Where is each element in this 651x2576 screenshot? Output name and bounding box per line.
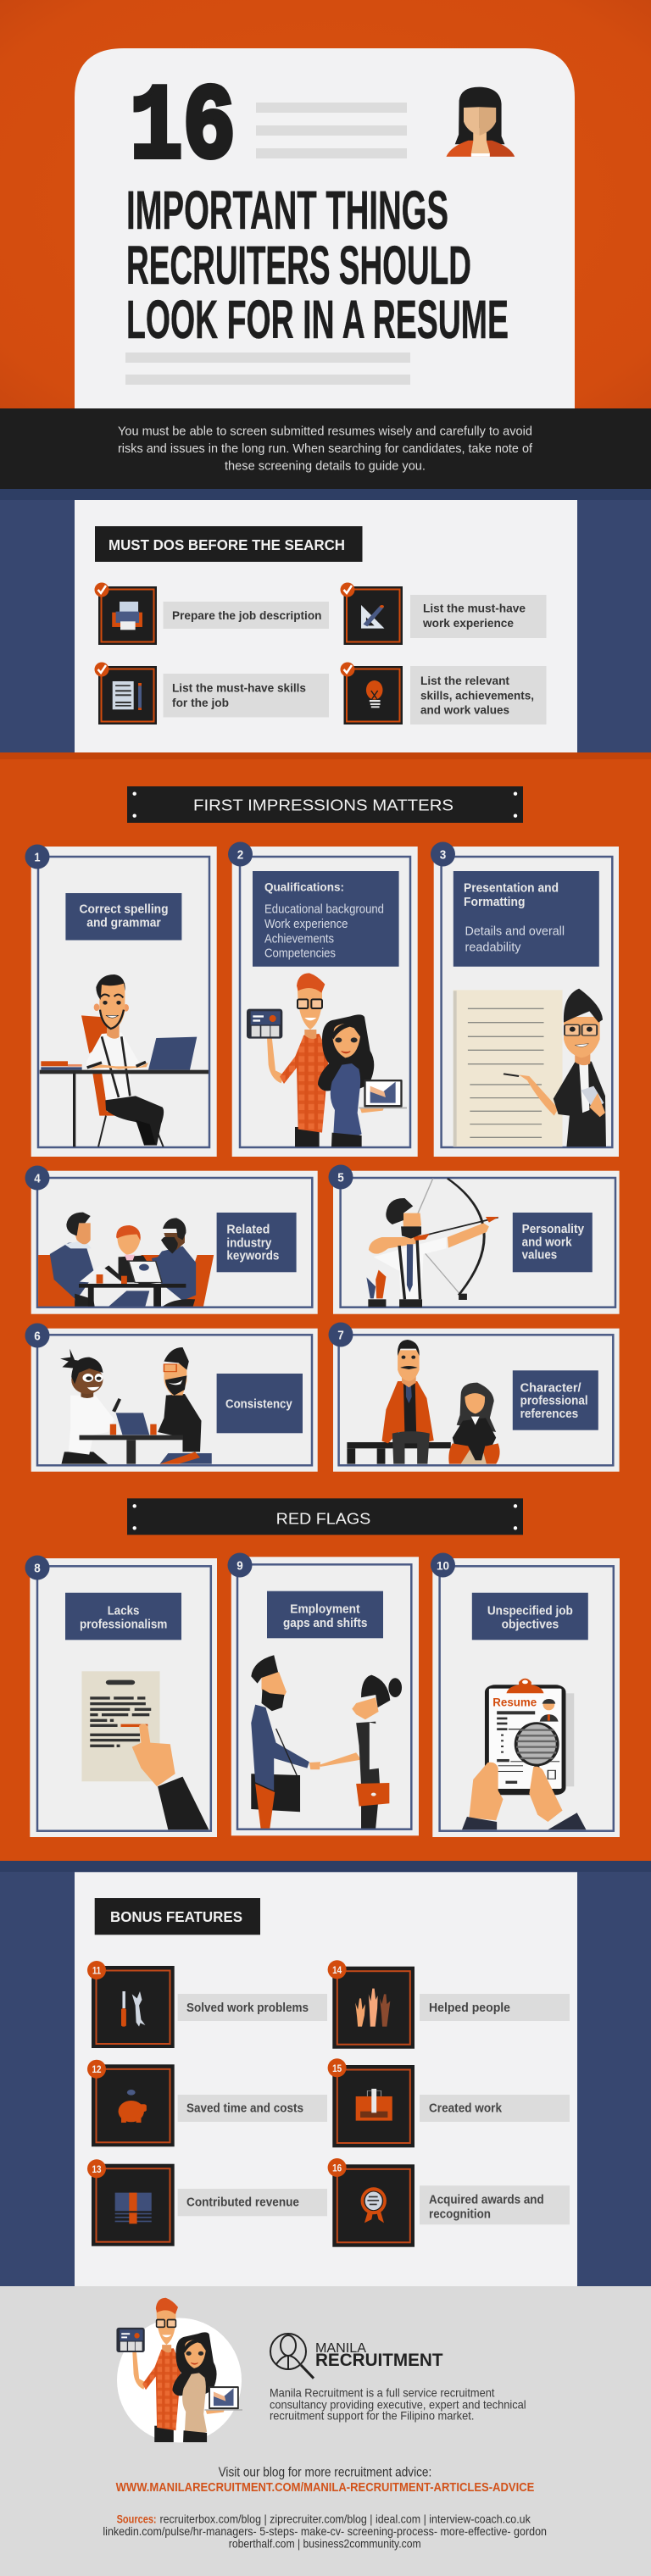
label box 4: Related [226,1224,270,1237]
sources [103,2512,547,2551]
number badge 7: 7 [337,1329,344,1342]
label box 5 [513,1213,593,1272]
label box 2 [253,871,399,967]
item 16: acquired awards: 16 [332,2162,342,2174]
number badge 2: 2 [237,847,243,863]
number badge 6 [25,1324,49,1347]
item 16: acquired awards: Acquired awards and [429,2193,544,2207]
number badge 8 [25,1556,49,1579]
item: list work experience [341,583,546,645]
label box 7 [513,1370,598,1430]
item 11: solved work problems: 11 [92,1964,101,1976]
item 13: contributed revenue: 13 [92,2163,102,2175]
orange main section background [0,752,651,1861]
sources: linkedin.com/pulse/hr-managers- 5-steps- make-cv- screening-process- more-effective- gordon [103,2524,547,2538]
heading plaque: first impressions: FIRST IMPRESSIONS MATTERS [193,797,453,814]
label box 2: Achievements [264,932,334,946]
item 14: helped people: Helped people [429,2001,510,2015]
illustration: man at desk [40,974,209,1146]
number badge 3: 3 [440,847,446,863]
logo: manila recruitment [270,2334,442,2379]
decorative lines below title [125,353,410,385]
illustration: archer [366,1179,499,1307]
company description: consultancy providing executive, expert and technical [270,2397,526,2411]
label box 7: professional [520,1395,588,1408]
item: prepare the job description: Prepare the job description [172,608,322,622]
footer section [0,2286,651,2576]
label box 5: and work [522,1235,572,1249]
panel 9: employment gaps and shifts [227,1552,419,1835]
label box 3: Details and overall [465,925,565,939]
panel 3: presentation and formatting [431,842,619,1157]
illustration: three people at table [38,1213,214,1307]
item 14: helped people: 14 [332,1964,342,1976]
label box 5: values [522,1249,557,1263]
heading: must dos: MUST DOS BEFORE THE SEARCH [108,536,345,553]
heading plaque: red flags: RED FLAGS [276,1510,370,1527]
number badge 10 [431,1552,455,1578]
company description: recruitment support for the Filipino market. [270,2409,474,2423]
label box 10 [472,1593,588,1640]
number badge 9: 9 [236,1559,243,1573]
item 14: helped people [328,1960,570,2049]
number badge 1: 1 [34,851,41,864]
item: list relevant skills: and work values [420,703,509,717]
label box 2: Work experience [264,918,348,931]
item 12: saved time and costs [87,2060,327,2146]
label box 6 [217,1374,303,1433]
panel 10: unspecified job objectives [431,1552,620,1837]
illustration: man and woman with devices [247,973,407,1146]
label box 10: Unspecified job [487,1605,573,1618]
label box 4: keywords [226,1250,279,1263]
panel 8: lacks professionalism [25,1556,217,1837]
item: list relevant skills [341,663,546,724]
item: list must-have skills: for the job [172,696,229,709]
label box 2: Qualifications: [264,880,344,894]
blog call to action [116,2466,534,2495]
number badge 6: 6 [34,1329,41,1344]
panel 5: personality and work values [329,1164,620,1314]
item 11: solved work problems: Solved work problems [186,2001,309,2015]
label box 1: Correct spelling [80,903,168,917]
label box 8: Lacks [108,1605,139,1618]
panel: bonus features [0,1861,651,2286]
sources: roberthalf.com | business2community.com [229,2537,421,2551]
item 15: created work: Created work [429,2102,503,2116]
item: list work experience: work experience [422,616,514,630]
title [126,180,509,350]
label box 1: and grammar [86,916,161,930]
item: list must-have skills [95,663,329,724]
label box 3: readability [465,941,521,955]
intro band: risks and issues in the long run. When searching for candidates, take note of [118,442,533,456]
item 13: contributed revenue: Contributed revenue [186,2196,299,2209]
illustration: resume under magnifier [462,1679,586,1829]
panel 7: character and professional references [329,1322,620,1472]
number badge 2 [228,842,253,866]
item 15: created work [328,2058,570,2147]
sources: Sources: [117,2512,157,2526]
big number 16: 16 [130,69,236,189]
number badge 10: 10 [437,1559,449,1573]
number badge 5: 5 [337,1171,344,1185]
number badge 5 [329,1164,353,1190]
illustration: man and woman on bench [347,1340,500,1464]
panel 2: qualifications [228,842,418,1157]
sources: recruiterbox.com/blog | ziprecruiter.com/blog | ideal.com | interview-coach.co.uk [159,2512,531,2526]
blog call to action: WWW.MANILARECRUITMENT.COM/MANILA-RECRUITMENT-ARTICLES-ADVICE [116,2480,534,2495]
label box 9: Employment [290,1602,360,1616]
label box 8: professionalism [80,1618,167,1632]
item: list relevant skills: List the relevant [420,674,509,687]
illustration: handshake [251,1655,402,1829]
intro band: these screening details to guide you. [225,459,426,473]
number badge 7 [329,1322,353,1347]
number badge 1 [25,844,49,869]
blog call to action: Visit our blog for more recruitment advice: [219,2466,431,2480]
title: IMPORTANT THINGS [126,180,448,241]
label box 9 [267,1591,383,1638]
illustration: resume under magnifier: Resume [492,1696,537,1708]
intro band [0,408,651,489]
intro band: You must be able to screen submitted resumes wisely and carefully to avoid [118,425,532,439]
label box 6: Consistency [225,1397,292,1411]
label box 1 [65,893,181,941]
heading plaque: first impressions [127,786,523,823]
illustration: finger on document [81,1671,209,1829]
label box 7: Character/ [520,1381,581,1395]
item 15: created work: 15 [332,2062,342,2074]
item 11: solved work problems [87,1961,327,2048]
heading plaque: red flags [127,1498,523,1535]
label box 8 [65,1593,181,1640]
logo: manila recruitment: RECRUITMENT [315,2350,442,2370]
illustration: presenter at board [453,989,606,1146]
item: list must-have skills: List the must-have skills [172,681,306,695]
company description [270,2386,526,2423]
number badge 9 [227,1552,253,1578]
number badge 4: 4 [34,1171,41,1186]
label box 3: Presentation and [464,882,559,896]
label box 3 [453,871,599,967]
label box 5: Personality [522,1223,584,1236]
company description: Manila Recruitment is a full service recruitment [270,2386,494,2400]
item 16: acquired awards [328,2158,570,2247]
panel 4: related industry keywords [25,1166,318,1314]
illustration: two people at laptop [60,1347,212,1464]
header background [0,0,651,408]
label box 4 [217,1213,297,1272]
item 13: contributed revenue [87,2159,327,2246]
label box 2: Competencies [264,947,336,961]
logo: manila recruitment: MANILA [315,2341,366,2356]
number badge 4 [25,1166,49,1190]
heading: must dos [95,526,363,562]
panel: must dos before the search [0,489,651,752]
label box 3: Formatting [464,896,526,909]
label box 2: Educational background [264,902,384,916]
header card [75,48,575,408]
heading: bonus features: BONUS FEATURES [110,1908,242,1925]
number badge 8: 8 [34,1561,41,1576]
number badge 3 [431,842,455,866]
illustration: company mascots [116,2298,242,2442]
label box 7: references [520,1407,578,1421]
item: prepare the job description [95,583,329,645]
panel 1: correct spelling and grammar [25,844,217,1157]
label box 10: objectives [502,1618,559,1632]
panel 6: consistency [25,1324,318,1472]
item 12: saved time and costs: 12 [92,2063,102,2075]
decorative lines beside number [256,103,407,158]
item: list relevant skills: skills, achievements, [420,688,534,702]
item: list work experience: List the must-have [423,602,526,615]
icon: woman avatar [446,87,515,157]
label box 4: industry [226,1236,271,1250]
item 12: saved time and costs: Saved time and costs [186,2102,303,2116]
heading: bonus features [95,1898,260,1935]
item 16: acquired awards: recognition [429,2208,491,2222]
label box 9: gaps and shifts [283,1617,367,1630]
